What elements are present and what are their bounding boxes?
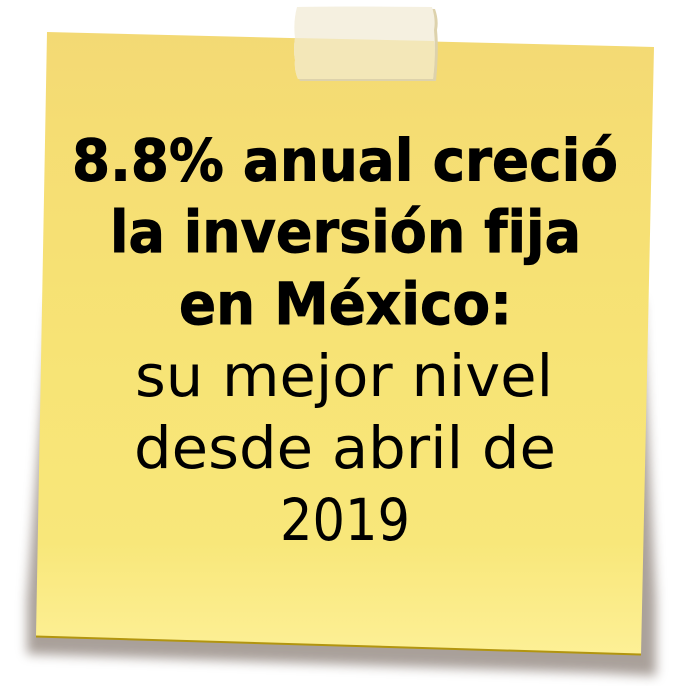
headline: la inversión fija xyxy=(110,198,581,266)
tape xyxy=(294,6,438,81)
subheading xyxy=(134,342,556,554)
headline xyxy=(72,126,618,338)
subheading: su mejor nivel xyxy=(135,342,553,410)
headline: 8.8% anual creció xyxy=(72,126,618,194)
note shadow xyxy=(27,300,656,676)
headline: en México: xyxy=(179,270,512,338)
subheading: desde abril de xyxy=(134,414,556,482)
subheading: 2019 xyxy=(280,486,410,554)
